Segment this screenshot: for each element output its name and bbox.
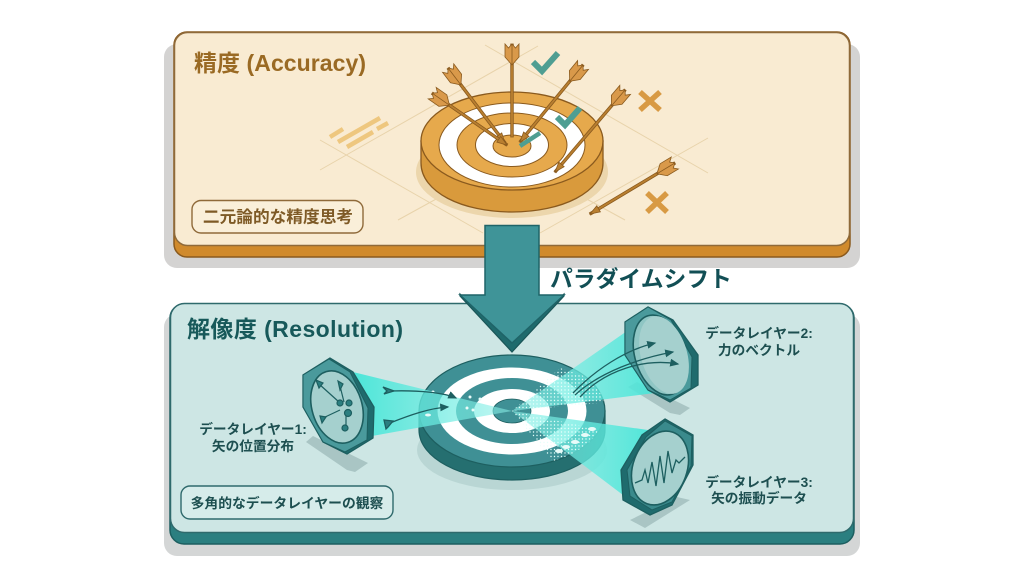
target: resolution [417,355,607,490]
perspective grid lines [320,45,708,233]
panel: resolution [164,304,860,556]
device: data layer 1 [302,358,374,454]
heading: paradigm shift: パラダイムシフト [550,266,732,292]
beam: layer 3 [512,411,648,495]
label: data layer 2: データレイヤー2: [705,325,813,341]
panel: accuracy [164,32,860,268]
arrow: missed target [586,157,678,220]
shadow: device 3 [630,497,690,528]
label: data layer 2 [705,325,813,358]
label: multi-angle observation [181,486,393,519]
device: data layer 2 [624,307,698,402]
dotted data texture on target [512,368,604,461]
arrows: into target [383,387,456,429]
label: binary accuracy thinking [192,200,363,233]
label: data layer 3: 矢の振動データ [711,490,807,506]
icon: check marks [520,53,580,146]
label: data layer 3: データレイヤー3: [705,474,813,490]
heading: resolution: 解像度 (Resolution) [187,316,403,342]
beam: layer 1 [353,372,512,436]
device: data layer 3 [621,419,698,515]
data points on target [425,390,596,453]
label: multi-angle observation: 多角的なデータレイヤーの観察 [191,495,384,511]
shadow: device 2 [628,382,690,415]
shadow: device 1 [306,436,368,472]
beam: layer 2 [512,322,655,411]
target: accuracy [416,92,608,218]
icon: vibration waveform [635,451,685,486]
label: binary accuracy thinking: 二元論的な精度思考 [203,208,353,226]
arrows: force vectors [573,343,678,397]
arrow: paradigm shift [460,226,564,352]
heading: accuracy: 精度 (Accuracy) [194,50,366,76]
label: data layer 1 [199,421,307,454]
label: data layer 1: データレイヤー1: [199,421,307,437]
label: data layer 3 [705,474,813,506]
label: data layer 2: 力のベクトル [718,343,800,358]
label: data layer 1: 矢の位置分布 [212,438,294,454]
arrows: accuracy hits [428,44,630,177]
icon: cross marks [640,92,667,212]
icon: arrow position scatter [316,380,352,431]
icon: tick marks [330,118,388,147]
